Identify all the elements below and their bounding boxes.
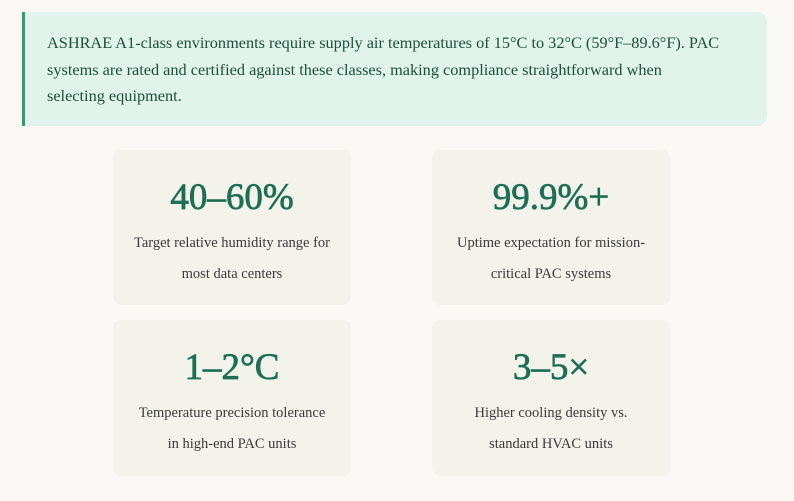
callout: systems are rated and certified against these classes, making compliance straightforward when [47, 60, 662, 78]
card: humidity: 40–60% [170, 177, 294, 218]
card: density [432, 320, 670, 476]
card: uptime: critical PAC systems [491, 266, 611, 282]
card: precision: in high-end PAC units [168, 436, 296, 452]
card: humidity: most data centers [182, 266, 282, 282]
card: uptime: Uptime expectation for mission- [457, 235, 645, 251]
card: density: 3–5× [513, 347, 589, 388]
card: uptime [432, 150, 670, 305]
callout: selecting equipment. [47, 86, 182, 105]
card: humidity [113, 150, 351, 305]
callout: ASHRAE A1-class environments require supply air temperatures of 15°C to 32°C (59°F–89.6°F). PAC [47, 33, 719, 52]
card: density: standard HVAC units [489, 436, 613, 452]
card: density: Higher cooling density vs. [474, 405, 628, 421]
card: precision [113, 320, 351, 476]
card: precision: 1–2°C [184, 347, 279, 388]
callout [22, 12, 767, 126]
card: humidity: Target relative humidity range for [134, 235, 330, 251]
card: precision: Temperature precision tolerance [139, 405, 325, 421]
card: uptime: 99.9%+ [493, 177, 609, 218]
